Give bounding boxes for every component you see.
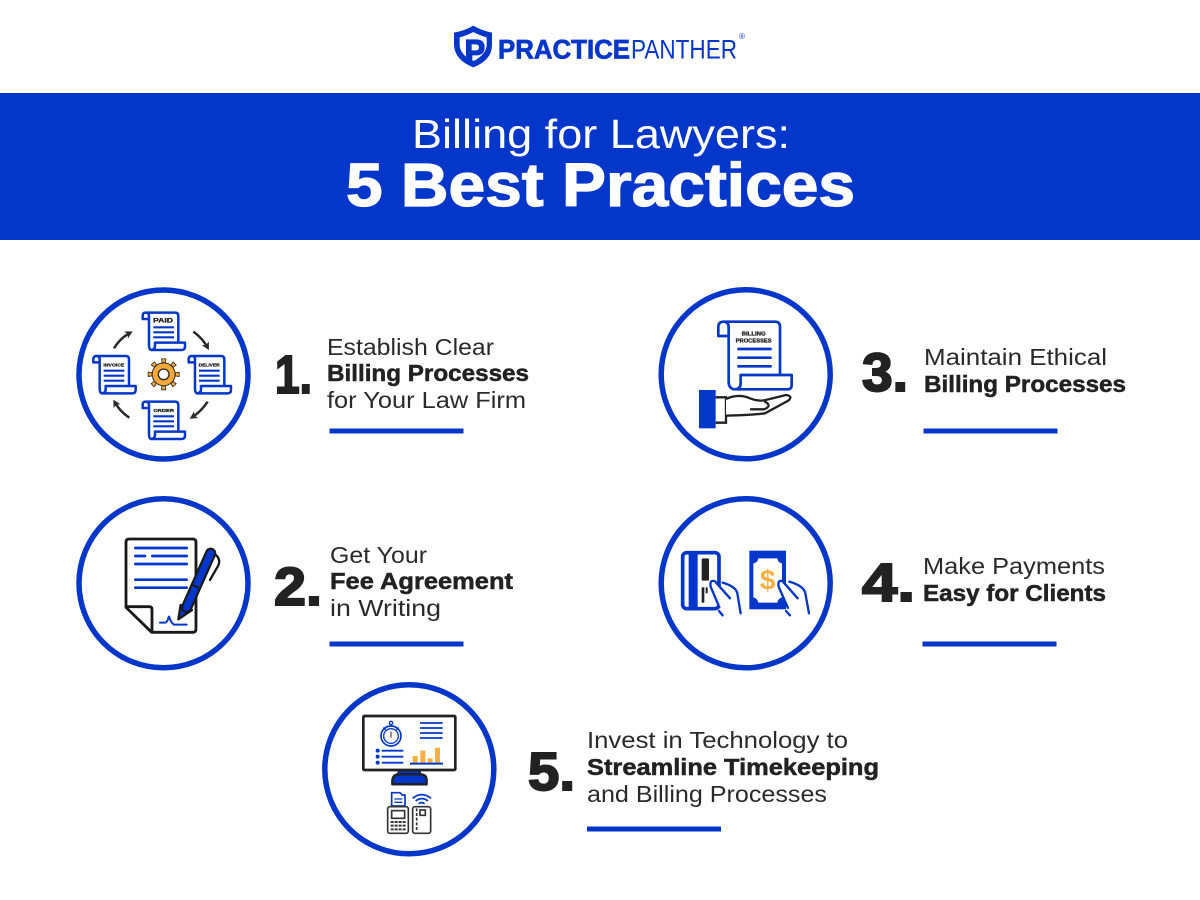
text: practice 5 bbox=[587, 727, 879, 807]
bulleted list bbox=[376, 749, 403, 765]
panel: practice 4 bbox=[661, 499, 1106, 668]
signature bbox=[160, 616, 187, 625]
icon: pen bbox=[178, 553, 219, 619]
panel: practice 3 bbox=[661, 290, 1126, 459]
report lines bbox=[420, 723, 443, 738]
panel: practice 5 bbox=[325, 685, 879, 854]
icon: billing cycle bbox=[79, 290, 248, 459]
text: practice 1: for Your Law Firm bbox=[327, 387, 526, 413]
icon: signed agreement bbox=[79, 499, 248, 668]
text: practice 1: Billing Processes bbox=[327, 360, 529, 386]
icon: shield logo bbox=[454, 26, 492, 67]
icon: monitor and payment terminal bbox=[325, 685, 494, 854]
hand on card bbox=[710, 581, 741, 615]
icon: hand holding document bbox=[661, 290, 830, 459]
payment terminal bbox=[388, 793, 408, 833]
icon: gear bbox=[150, 361, 177, 388]
number 2: 2. bbox=[274, 557, 322, 617]
document bbox=[126, 539, 196, 632]
banknote: $ bbox=[760, 564, 776, 595]
text: practice 3 bbox=[924, 344, 1126, 397]
text: practice 2: Get Your bbox=[330, 542, 427, 568]
icon: card and cash payment bbox=[661, 499, 830, 668]
logo bbox=[454, 26, 745, 67]
panel: practice 2 bbox=[79, 499, 513, 668]
text: practice 3: Maintain Ethical bbox=[924, 344, 1107, 370]
header banner bbox=[0, 93, 1200, 240]
logo: PANTHER bbox=[631, 34, 737, 64]
text: practice 2: Fee Agreement bbox=[330, 568, 513, 594]
hand on banknote bbox=[778, 581, 809, 615]
panel: practice 1 bbox=[79, 290, 529, 459]
text: practice 4: Easy for Clients bbox=[923, 580, 1106, 606]
text: practice 1: Establish Clear bbox=[327, 334, 494, 360]
text: practice 5: and Billing Processes bbox=[587, 781, 827, 807]
icon: hand holding document: BILLING bbox=[742, 331, 766, 337]
text: practice 5: Invest in Technology to bbox=[587, 727, 848, 753]
text: practice 5: Streamline Timekeeping bbox=[587, 754, 879, 780]
document: deliver: DELIVER bbox=[199, 363, 220, 368]
logo wordmark: PRACTICE bbox=[498, 34, 630, 64]
title line 1: Billing for Lawyers: bbox=[412, 111, 790, 157]
text: practice 3: Billing Processes bbox=[924, 371, 1126, 397]
document: paid: PAID bbox=[153, 318, 174, 325]
monitor bbox=[363, 716, 455, 784]
text: practice 4: Make Payments bbox=[923, 553, 1105, 579]
document: invoice: INVOICE bbox=[103, 363, 124, 368]
text: practice 2 bbox=[330, 542, 513, 621]
number 4: 4. bbox=[862, 553, 915, 613]
logo: ® bbox=[739, 32, 745, 41]
text: practice 2: in Writing bbox=[330, 595, 441, 621]
document: order: ORDER bbox=[153, 408, 174, 414]
title line 2: 5 Best Practices bbox=[346, 151, 855, 219]
number 5: 5. bbox=[528, 742, 575, 802]
icon: hand holding document: PROCESSES bbox=[736, 338, 772, 344]
credit card bbox=[683, 553, 719, 609]
number 3: 3. bbox=[862, 343, 908, 403]
document bbox=[718, 322, 792, 389]
bar chart bbox=[410, 748, 443, 764]
contactless card bbox=[413, 795, 431, 833]
arrows: cycle bbox=[114, 332, 208, 418]
text: practice 1 bbox=[327, 334, 529, 413]
stopwatch bbox=[381, 721, 401, 746]
hand bbox=[716, 397, 726, 423]
text: practice 4 bbox=[923, 553, 1106, 606]
number 1: 1. bbox=[275, 345, 312, 405]
